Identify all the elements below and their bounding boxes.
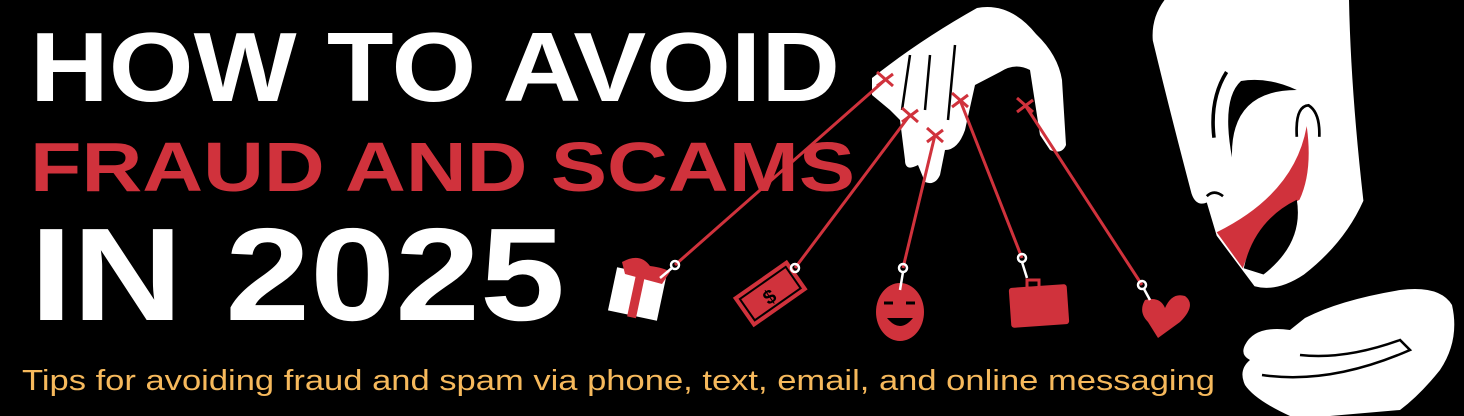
strings [675,72,1142,285]
icon: money: $ [759,285,781,310]
hooks [660,254,1150,300]
icon: heart [1142,295,1190,338]
title line 1: HOW TO AVOID [30,12,840,122]
icon: briefcase [1009,280,1069,328]
icon: gift [608,258,670,321]
subtitle: Tips for avoiding fraud and spam via phone, text, email, and online messaging [22,365,1215,397]
icon: money [733,260,808,327]
lower hand [1242,289,1454,416]
puppeteer hand [872,7,1066,183]
mask [1153,0,1363,288]
title line 3: IN 2025 [30,201,565,348]
title line 2: FRAUD AND SCAMS [30,128,855,206]
icon: mask face [876,283,924,341]
